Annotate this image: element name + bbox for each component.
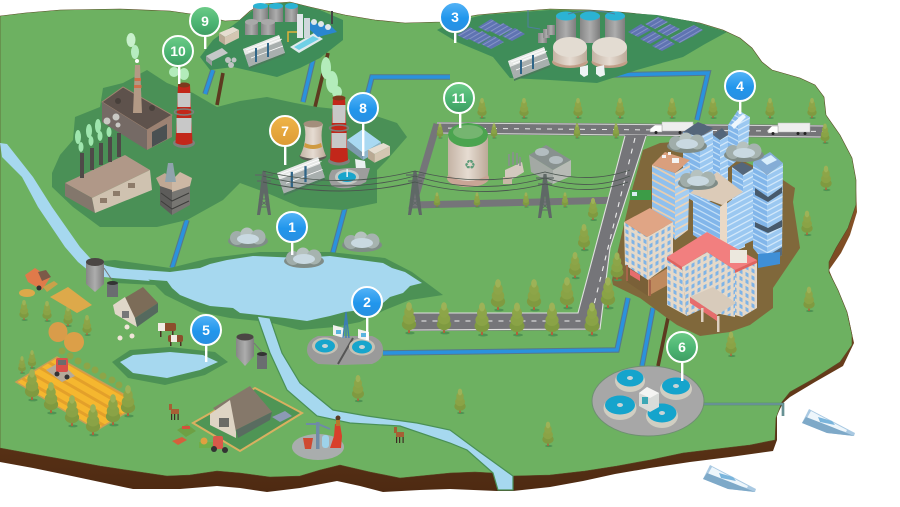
panel: treatment plant 2 xyxy=(307,312,383,365)
lake xyxy=(113,256,422,321)
panel: zone 10 factories xyxy=(65,33,195,215)
tower D xyxy=(732,162,754,245)
pin 7 xyxy=(270,116,300,165)
dark ground patch: city xyxy=(612,140,800,336)
stack smoke xyxy=(169,67,189,80)
pin 5: 5 xyxy=(202,322,210,338)
pin 10 xyxy=(163,36,193,84)
cooling tower xyxy=(300,120,326,161)
pin 5 xyxy=(191,315,221,362)
pond 5 xyxy=(120,352,218,378)
machinery xyxy=(508,47,550,81)
panel: farm north xyxy=(19,258,183,352)
pin 9: 9 xyxy=(201,13,209,29)
cows and chickens xyxy=(118,323,183,346)
pin 2 xyxy=(352,287,382,340)
pin 2: 2 xyxy=(363,294,371,310)
chimney smoke xyxy=(75,33,139,152)
long factory xyxy=(65,155,152,213)
dark ground patch: zone 3 xyxy=(437,10,727,83)
solar pad xyxy=(272,411,292,422)
shrub row xyxy=(58,348,122,388)
city clouds xyxy=(667,132,764,190)
pin 1: 1 xyxy=(288,219,296,235)
red stack 8 xyxy=(328,96,350,166)
recycle symbol: ♻ xyxy=(464,158,476,173)
storage tanks xyxy=(528,10,625,43)
solar left xyxy=(457,19,525,49)
pin 3: 3 xyxy=(451,9,459,25)
silo pair xyxy=(86,258,118,297)
enclosure xyxy=(193,388,302,451)
white digesters xyxy=(552,37,628,68)
red stack 10 xyxy=(173,82,195,148)
pin 1 xyxy=(277,212,307,255)
haystacks xyxy=(48,322,84,352)
valve block xyxy=(206,48,236,68)
pin 6: 6 xyxy=(678,339,686,355)
factory tall chimney xyxy=(133,65,142,113)
cooler unit xyxy=(529,145,571,184)
pin 6 xyxy=(667,332,697,381)
tower A xyxy=(683,122,713,205)
pin 11 xyxy=(444,83,474,128)
road network xyxy=(408,122,825,331)
panel: woman at hand pump xyxy=(292,416,344,460)
tower B xyxy=(713,128,728,200)
pin 10: 10 xyxy=(170,43,186,59)
panel: zone 7 and 8 power plant xyxy=(277,57,390,196)
pin 8: 8 xyxy=(359,100,367,116)
pin 3 xyxy=(440,2,470,43)
barn roof and walls xyxy=(210,386,272,438)
power lines and pylons xyxy=(255,170,630,218)
trees xyxy=(18,98,832,447)
barn xyxy=(113,287,158,327)
air unit xyxy=(368,143,390,163)
tan plot xyxy=(50,287,92,313)
tractor xyxy=(46,358,75,382)
pin 4 xyxy=(725,71,755,114)
dark ground patch: zone 9 xyxy=(200,3,343,77)
panel: fenced barn xyxy=(172,386,302,453)
fountain tank xyxy=(329,168,370,188)
land soil edge xyxy=(0,190,857,492)
river from the west into the lake xyxy=(0,143,150,281)
dark ground patch: power plants xyxy=(52,70,407,227)
blue unit xyxy=(310,11,337,37)
solar right xyxy=(628,17,703,51)
panel: zone 3 solar and storage xyxy=(457,10,703,81)
pin 11: 11 xyxy=(452,90,467,106)
panel: city xyxy=(624,110,783,332)
pin 8 xyxy=(348,93,378,156)
outflow river xyxy=(257,316,513,490)
tower C xyxy=(728,110,750,168)
panel: treatment plant 6 xyxy=(592,366,704,436)
five chimneys xyxy=(80,133,121,178)
pipes: water and sewer connections xyxy=(172,53,783,416)
machinery factory block xyxy=(102,87,172,150)
pin 7: 7 xyxy=(281,123,289,139)
panel: zone 11 biogas and substation xyxy=(447,123,571,187)
ship 2 xyxy=(703,465,756,492)
panel: silo and deer by the pond xyxy=(169,334,404,443)
building H xyxy=(624,208,673,296)
pond 5 shore xyxy=(112,347,228,385)
stack smoke 8 xyxy=(321,57,342,98)
panel: crop field xyxy=(16,348,135,436)
white columns and yellow pipe xyxy=(288,14,310,42)
pin 9 xyxy=(190,6,220,49)
harvester xyxy=(19,268,58,297)
air unit xyxy=(219,27,239,45)
pool xyxy=(290,33,323,53)
scrubber tower xyxy=(156,163,192,215)
ship 1 xyxy=(802,409,855,436)
transformer xyxy=(503,152,524,184)
white box xyxy=(355,159,366,170)
crates and tractor xyxy=(172,424,228,453)
machinery xyxy=(243,35,285,69)
building G xyxy=(652,152,690,240)
field xyxy=(16,357,127,430)
machinery xyxy=(277,157,325,196)
clouds over the lake xyxy=(228,228,382,268)
hotel xyxy=(667,232,780,332)
field trees xyxy=(25,369,135,436)
building F xyxy=(690,172,745,258)
lake shore halo xyxy=(90,252,443,330)
trucks xyxy=(630,122,810,200)
digester tank xyxy=(447,123,489,187)
panel: zone 9 water plant xyxy=(206,3,337,69)
tower E xyxy=(753,152,783,265)
pin 4: 4 xyxy=(736,78,744,94)
blue-roof building xyxy=(347,129,381,160)
white boxes xyxy=(580,65,605,77)
tanks xyxy=(245,3,298,35)
